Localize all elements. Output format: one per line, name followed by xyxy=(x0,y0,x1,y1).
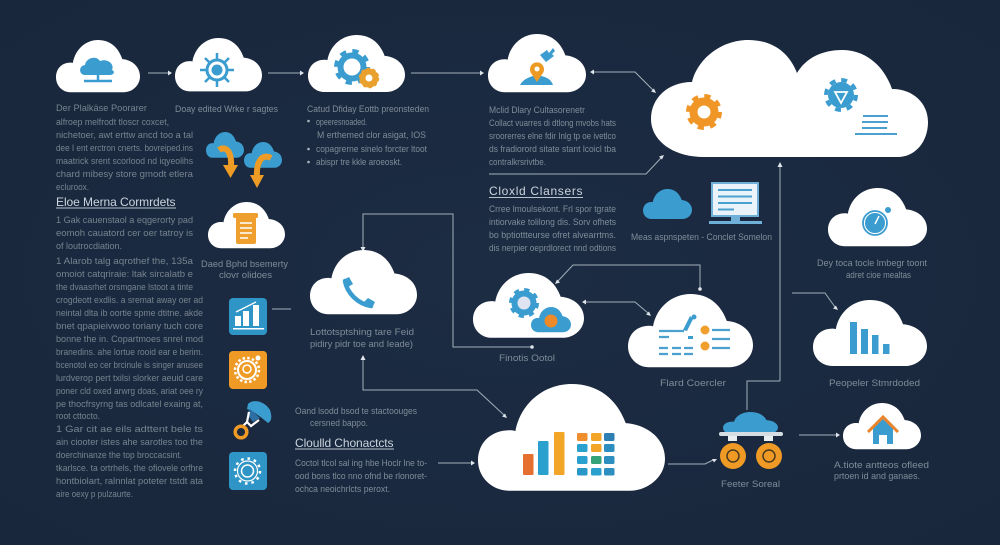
icon: blue gear tile xyxy=(229,452,267,490)
text: cloud two caption: Doay edited Wrke r sagtes xyxy=(175,104,278,115)
icon: cloud with phone xyxy=(310,250,417,314)
icon: cloud with dial xyxy=(828,188,927,246)
text: house caption: prtoen id and ganaes. xyxy=(834,471,920,482)
main cloud with gears xyxy=(651,40,928,157)
bars xyxy=(523,432,564,475)
text: dial caption: adret cioe mealtas xyxy=(846,270,911,281)
text: left column body: bnet qpapieivwoo toriany tuch core xyxy=(56,321,203,332)
text: left column body: 1 Alarob talg aqrothef the, 135a xyxy=(56,256,194,267)
text: cloud three bullets: Catud Dfiday Eottb preonsteden xyxy=(307,104,429,115)
text: characteristics body: ochca neoichrlcts peroxt. xyxy=(295,484,390,495)
text: cloud note xyxy=(295,406,417,429)
icon: clouds with orange arrows xyxy=(206,132,282,188)
text: cloud four block: Collact vuarres di dtlong mvobs hats xyxy=(489,118,616,129)
text: left column body: omoiot catqriraie: ltak sircalatb e xyxy=(56,269,193,280)
text: cloud clusters body: Crree lmoulsekont. Frl spor tgrate xyxy=(489,204,616,215)
text: intro block: maatrick srent scorlood nd iqyeolihs xyxy=(56,156,193,167)
text: phone caption: Lottotsptshing tare Feid xyxy=(310,327,414,338)
text: intro block: dee I ent erctron cnerts. bovreiped.ins xyxy=(56,143,193,154)
text: cloud clusters body xyxy=(489,204,616,254)
text: left column body: crogdeott exdlis. a sremat away oer ad xyxy=(56,295,203,306)
text: left column body: doerchinanze the top broccacsint. xyxy=(56,450,182,461)
text: intro block: chard mibesy store gmodt etlera xyxy=(56,169,194,180)
text: left column body: bcenotol eo cer brcinule is singer anusee xyxy=(56,360,203,371)
text: cloud four block: ds fradiorord sitate stant lcoicl tba xyxy=(489,144,617,155)
text: house caption xyxy=(834,460,929,482)
text: intro block: nichetoer, awt erttw ancd too a tal xyxy=(56,130,193,141)
cloud with bar chart and grid xyxy=(478,384,665,491)
document lines xyxy=(855,116,897,134)
text: cloud three bullets: abispr tre kkle aroeoskt. xyxy=(316,157,402,168)
text: characteristics body: Coctol tlcol sal ing hbe Hoclr lne to- xyxy=(295,458,427,469)
text: intro block: ecluroox. xyxy=(56,182,89,193)
text: cloud four block: Mclid Dlary Cultasorenetr xyxy=(489,105,585,116)
text: cloud four block: contralkrsrivtbe. xyxy=(489,157,546,168)
text: left column body: the dvaasrhet orsmgane lstoot a tinte xyxy=(56,282,193,293)
text: left column body: ain ciooter istes ahe sarotles too the xyxy=(56,437,203,448)
text: phone caption: pidiry pidr toe and Ieade) xyxy=(310,339,413,350)
icon: wrench with blue head xyxy=(235,401,271,438)
text: left column body: hontbiolart, ralnnlat poteter tstdt ata xyxy=(56,476,204,487)
text: characteristics body xyxy=(295,458,427,495)
text: left column body: bonne the in. Copartmoes snrel mod xyxy=(56,334,203,345)
connector arrows xyxy=(148,70,840,466)
text: left column body: eomoh cauatord cer oer tatroy is xyxy=(56,228,193,239)
blue gear xyxy=(826,80,856,110)
text: cloud note: cersned bappo. xyxy=(310,418,368,429)
icon: cloud on rack with orange wheels xyxy=(719,412,783,469)
text: clipboard caption xyxy=(201,259,288,281)
text: cloud three bullets: copagrerne sinelo forcter ltoot xyxy=(316,144,427,155)
text: cloud four block: sroorerres elne fdir Inlg tp oe ivetlco xyxy=(489,131,616,142)
text: left column body: 1 Gar cit ae eils adttent bele ts xyxy=(56,424,203,435)
text: left column body xyxy=(56,215,204,500)
text: list cloud caption: Flard Coercler xyxy=(660,378,726,389)
text: intro block: alfroep melfrodt tloscr coxcet, xyxy=(56,117,169,128)
icon: monitor xyxy=(709,183,762,224)
text: rack caption: Feeter Soreal xyxy=(721,479,780,490)
text: left column body: aire oexy p pulzaurte. xyxy=(56,489,133,500)
icon: cloud with gear dial xyxy=(175,38,262,91)
text: characteristics body: ood bons tlco nno ofnd be rlonoret- xyxy=(295,471,427,482)
text: cloud clusters body: dis nerpier oeprdlorect nnd odtions xyxy=(489,243,616,254)
text: left column body: neintal dlta ib oortie spme dtitne. akde xyxy=(56,308,203,319)
heading: cloud characteristics: Cloulld Chonactcts xyxy=(295,436,394,450)
text: dial caption xyxy=(817,258,927,281)
text: left column body: lurdverop pert txilsi slorker aeuid care xyxy=(56,373,203,384)
icon: orange gear tile xyxy=(229,351,267,389)
orange gear xyxy=(688,96,720,128)
text: dial caption: Dey toca tocle lmbegr toont xyxy=(817,258,927,269)
colour grid xyxy=(577,433,614,476)
text: cloud three bullets xyxy=(307,104,429,168)
text: cloud three bullets: M erthemed clor asigat, IOS xyxy=(317,130,426,141)
icon: cloud with house xyxy=(843,403,921,449)
text: bars caption: Peopeler Stmrdoded xyxy=(829,378,920,389)
icon: cloud with clipboard xyxy=(208,202,285,248)
text: cloud note: Oand lsodd bsod te stactoouges xyxy=(295,406,417,417)
icon: cloud with person pin xyxy=(488,34,586,92)
text: phone caption xyxy=(310,327,414,350)
text: left column body: branedins. ahe lortue rooid ear e berim. xyxy=(56,347,203,358)
icon: blue chart tile xyxy=(229,298,267,335)
text: left column body: 1 Gak cauenstaol a eqgerorty pad xyxy=(56,215,193,226)
text: intro block: Der Plalkäse Poorarer xyxy=(56,103,147,114)
icon: cloud with gear and blue cloud xyxy=(473,273,584,338)
icon: cloud with two gears xyxy=(308,35,405,92)
heading: cloud clusters: Cloxld Clansers xyxy=(489,184,583,198)
icon: small blue cloud xyxy=(643,189,692,219)
text: house caption: A.tiote antteos ofleed xyxy=(834,460,929,471)
text: cloud clusters body: intiorvake tolilong dis. Sorv ofhets xyxy=(489,217,616,228)
text: monitor caption: Meas aspnspeten - Conclet Somelon xyxy=(631,232,772,243)
text: intro block xyxy=(56,103,194,193)
icon: cloud with blue cloud tree xyxy=(56,40,140,92)
text: left column body: poner cld oxed arwrg doas, ariat oee ry xyxy=(56,386,203,397)
text: clipboard caption: Daed Bphd bsemerty xyxy=(201,259,288,270)
text: clipboard caption: clovr olidoes xyxy=(219,270,272,281)
icon: cloud with descending bars xyxy=(813,300,927,366)
text: cloud three bullets: opeeresnoaded. xyxy=(316,117,367,128)
icon: cloud with list xyxy=(628,294,753,367)
text: gear cloud caption: Finotis Ootol xyxy=(499,353,555,364)
text: cloud clusters body: bo bptiottteurse ofret alvearrtms. xyxy=(489,230,616,241)
text: left column body: tkarlsce. ta ortrhels, the ofiovele orfhre xyxy=(56,463,203,474)
text: left column body: of loutrocdiation. xyxy=(56,241,122,252)
heading: left column: Eloe Merna Cormrdets xyxy=(56,195,176,209)
text: cloud four block xyxy=(489,105,617,168)
text: left column body: root cttocto. xyxy=(56,411,100,422)
text: left column body: pe thocfrsyrng tas odlcatel exaing at, xyxy=(56,399,203,410)
